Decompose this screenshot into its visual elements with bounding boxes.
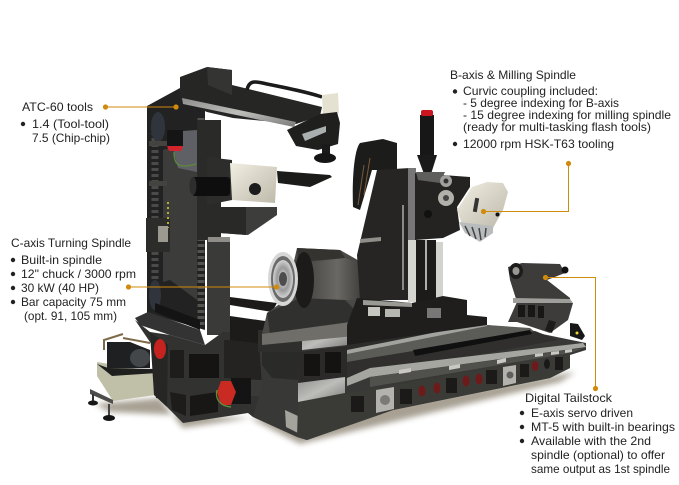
- hydraulic unit: [88, 334, 168, 421]
- chain conduit: [230, 297, 277, 345]
- callout: Digital Tailstock: Available with the 2nd: [531, 434, 651, 448]
- floor shadow: [95, 372, 575, 444]
- leader: Digital Tailstock: [543, 275, 598, 391]
- callout: Digital Tailstock: E-axis servo driven: [531, 406, 633, 420]
- machine base left block: [135, 320, 262, 423]
- bed front details: [351, 349, 572, 413]
- callout: ATC-60 tools: ATC-60 tools: [22, 100, 93, 114]
- C-axis turning spindle headstock: [262, 248, 365, 345]
- machine illustration: [88, 67, 586, 444]
- callout: Digital Tailstock: spindle (optional) to offer: [531, 448, 665, 462]
- callout: C-axis Turning Spindle: 30 kW (40 HP): [21, 281, 99, 295]
- column: ATC tower: [135, 88, 230, 345]
- servo motor with red cap: [217, 378, 273, 407]
- callout: C-axis Turning Spindle: (opt. 91, 105 mm): [24, 309, 117, 323]
- callout: Digital Tailstock: [520, 391, 675, 476]
- rotary magazine housing: [190, 157, 277, 235]
- callout: B-axis & Milling Spindle: 12000 rpm HSK-T63 tooling: [463, 137, 614, 151]
- callout: B-axis & Milling Spindle: [450, 68, 671, 151]
- bed main body: [253, 317, 586, 440]
- callout: B-axis & Milling Spindle: - 5 degree indexing for B-axis: [463, 96, 619, 110]
- callout: Digital Tailstock: same output as 1st spindle: [531, 462, 670, 476]
- overhead ATC beam and arm: [180, 67, 340, 187]
- callout: ATC-60 tools: [21, 100, 110, 145]
- callout: B-axis & Milling Spindle: Curvic coupling included:: [463, 84, 598, 98]
- callout: Digital Tailstock: MT-5 with built-in bearings: [531, 420, 675, 434]
- digital tailstock: [508, 263, 585, 340]
- callout: C-axis Turning Spindle: Built-in spindle: [21, 253, 102, 267]
- callout: C-axis Turning Spindle: 12" chuck / 3000 rpm: [21, 267, 136, 281]
- chuck: [268, 252, 298, 306]
- callout: C-axis Turning Spindle: C-axis Turning Spindle: [11, 236, 131, 250]
- leader: C-axis Turning Spindle: [126, 284, 279, 290]
- leader: B-axis & Milling Spindle: [481, 161, 571, 214]
- callout: B-axis & Milling Spindle: - 15 degree indexing for milling spindle: [463, 108, 671, 122]
- callout: ATC-60 tools: 1.4 (Tool-tool): [32, 117, 109, 131]
- callout: C-axis Turning Spindle: [11, 236, 136, 323]
- callout: C-axis Turning Spindle: Bar capacity 75 mm: [21, 295, 126, 309]
- callout: Digital Tailstock: Digital Tailstock: [525, 391, 613, 405]
- callout: B-axis & Milling Spindle: (ready for multi-tasking flash tools): [463, 120, 651, 134]
- callout: B-axis & Milling Spindle: B-axis & Milling Spindle: [450, 68, 576, 82]
- milling spindle head: [457, 182, 508, 242]
- callout: ATC-60 tools: 7.5 (Chip-chip): [32, 131, 110, 145]
- B-axis column and rails: [347, 139, 487, 345]
- leader: ATC-60 tools: [103, 104, 179, 110]
- B-axis head and motor: [415, 110, 470, 240]
